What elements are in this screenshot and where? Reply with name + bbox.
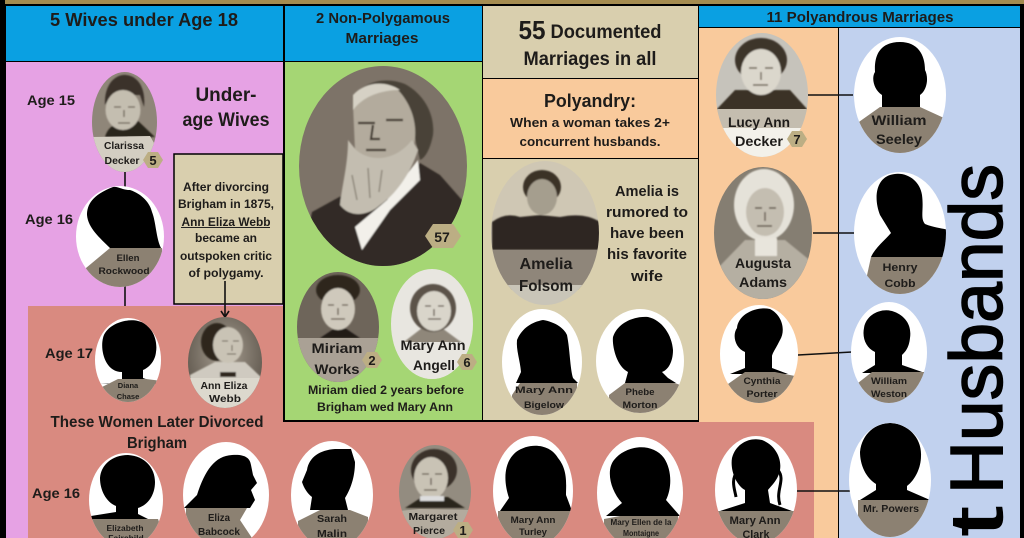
callout: Ann Eliza Webb: outspoken critic — [180, 249, 272, 263]
panel: 55 documented marriages: Documented — [550, 22, 662, 43]
heading: these women later divorced: These Women Later Divorced — [50, 414, 264, 431]
callout: Ann Eliza Webb: Ann Eliza Webb — [182, 215, 270, 229]
badge: 1: 1 — [459, 523, 467, 538]
portrait: Diana Chase: Chase — [117, 392, 139, 401]
panel: husbands column — [839, 28, 1020, 538]
portrait: Eliza Babcock: Eliza — [208, 513, 230, 524]
note: Amelia favorite: rumored to — [606, 205, 688, 221]
heading: 2 non-polygamous marriages — [285, 6, 482, 61]
note: Amelia favorite: wife — [630, 269, 663, 285]
portrait: Mary Ann Turley — [493, 436, 573, 538]
portrait: Clarissa Decker: Clarissa — [104, 141, 144, 152]
portrait: Mary Ann Angell: Angell — [413, 357, 455, 373]
portrait: Augusta Adams — [714, 167, 812, 300]
badge: 5: 5 — [149, 153, 157, 168]
portrait: Brigham Young — [299, 66, 470, 270]
note: Amelia favorite: have been — [610, 226, 684, 242]
note: Miriam — [308, 385, 464, 414]
portrait: Ellen Rockwood — [76, 186, 165, 290]
portrait: Eliza Babcock: Babcock — [198, 527, 240, 538]
portrait: William Weston: William — [871, 376, 907, 386]
heading: 2 non-polygamous marriages: 2 Non-Polygamous — [316, 10, 450, 27]
portrait: Augusta Adams: Adams — [739, 274, 787, 290]
portrait: Mary Ellen de la Montaigne: Mary Ellen de la — [610, 518, 672, 527]
portrait: Margaret Pierce — [399, 445, 473, 538]
portrait: Henry Cobb — [854, 172, 950, 295]
large rotated title fragment: t — [935, 506, 1018, 536]
portrait: Mary Ann Angell — [391, 269, 477, 380]
note: Miriam: Brigham wed Mary Ann — [317, 402, 453, 414]
portrait: Mary Ann Bigelow — [502, 309, 582, 416]
badge: 57 — [425, 224, 461, 248]
heading: these women later divorced — [50, 414, 264, 452]
portrait: Augusta Adams: Augusta — [735, 255, 791, 271]
panel: polyandrous wives column — [699, 28, 838, 538]
portrait: Sarah Malin — [291, 441, 373, 538]
portrait: Ann Eliza Webb — [185, 317, 265, 410]
note: Amelia favorite — [606, 184, 688, 285]
portrait: Ann Eliza Webb: Ann Eliza — [200, 381, 248, 392]
portrait: Phebe Morton: Morton — [622, 400, 658, 411]
age label: 16: Age 16 — [25, 211, 73, 227]
callout: Ann Eliza Webb: of polygamy. — [188, 266, 264, 280]
portrait: Mary Ann Bigelow: Bigelow — [524, 400, 565, 411]
portrait: Mr. Powers: Mr. Powers — [863, 504, 919, 515]
panel: polyandry definition: concurrent husbands. — [520, 134, 660, 149]
panel: non-polygamous — [285, 6, 482, 420]
portrait: Phebe Morton — [596, 309, 684, 416]
portrait: Sarah Malin: Sarah — [317, 513, 347, 525]
heading: 11 polyandrous marriages — [699, 6, 1020, 27]
section label: under-age wives — [182, 85, 270, 131]
portrait: Miriam Works — [296, 272, 382, 384]
section label: under-age wives: Under- — [196, 85, 256, 106]
portrait: Clarissa Decker — [92, 72, 163, 173]
age label: 17: Age 17 — [45, 345, 93, 361]
portrait: Eliza Babcock — [183, 442, 269, 538]
portrait: Phebe Morton: Phebe — [626, 387, 654, 398]
panel: 55 documented marriages: 55 — [518, 15, 546, 45]
note: Miriam: Miriam died 2 years before — [308, 385, 464, 397]
heading: 11 polyandrous marriages: 11 Polyandrous Marriages — [766, 10, 954, 26]
portrait: Clarissa Decker: Decker — [104, 156, 140, 167]
portrait: Cynthia Porter: Porter — [746, 389, 778, 399]
age label: 16 lower: Age 16 — [32, 485, 80, 501]
note: Amelia favorite: Amelia is — [615, 184, 679, 200]
note: Amelia favorite: his favorite — [607, 247, 687, 263]
portrait: Ellen Rockwood: Ellen — [116, 253, 140, 264]
heading: 2 non-polygamous marriages: Marriages — [346, 30, 418, 47]
portrait: Margaret Pierce: Pierce — [413, 525, 445, 537]
panel: polyandry definition: When a woman takes 2+ — [510, 115, 670, 130]
age label: 15: Age 15 — [27, 92, 75, 108]
heading: these women later divorced: Brigham — [127, 435, 187, 452]
portrait: Ann Eliza Webb: Webb — [209, 394, 241, 405]
portrait: William Seeley: William — [872, 112, 926, 128]
portrait: Mary Ann Turley: Turley — [519, 527, 548, 538]
callout: Ann Eliza Webb: Brigham in 1875, — [178, 197, 274, 211]
portrait: William Seeley: Seeley — [876, 131, 922, 147]
callout: Ann Eliza Webb: After divorcing — [183, 180, 269, 194]
callout: Ann Eliza Webb — [174, 154, 283, 304]
portrait: Cynthia Porter: Cynthia — [744, 376, 782, 386]
portrait: Lucy Ann Decker — [716, 33, 808, 157]
panel: 55 documented marriages: Marriages in all — [524, 49, 656, 70]
portrait: William Seeley — [853, 37, 946, 155]
portrait: Mary Ann Clark — [715, 436, 797, 538]
portrait: Miriam Works: Works — [314, 361, 360, 377]
heading: 5 wives under age 18: 5 Wives under Age 18 — [50, 10, 238, 30]
panel: 55 documented marriages — [483, 6, 698, 78]
badge: 6: 6 — [463, 355, 471, 370]
panel: under-age wives — [6, 6, 283, 538]
portrait: Henry Cobb: Cobb — [884, 278, 916, 290]
badge: 57: 57 — [434, 229, 450, 245]
portrait: Lucy Ann Decker: Decker — [735, 133, 784, 149]
portrait: Miriam Works: Miriam — [312, 340, 362, 356]
callout: Ann Eliza Webb: became an — [195, 231, 257, 245]
badge: 2: 2 — [368, 353, 376, 368]
large rotated title: Husbands: Husbands — [935, 164, 1018, 494]
connector lines — [125, 95, 855, 491]
portrait: Mary Ann Angell: Mary Ann — [400, 337, 466, 353]
panel: polyandry definition — [483, 79, 698, 158]
portrait: William Weston — [851, 302, 927, 405]
panel: wives who divorced — [28, 306, 814, 538]
portrait: Elizabeth Fairchild: Elizabeth — [106, 523, 144, 533]
heading: 5 wives under age 18 — [6, 6, 283, 61]
portrait: Mary Ann Bigelow: Mary Ann — [515, 385, 573, 396]
portrait: Margaret Pierce: Margaret — [408, 511, 458, 523]
portrait: Amelia Folsom: Folsom — [519, 278, 573, 295]
top strip — [5, 0, 1024, 4]
portrait: Diana Chase — [95, 318, 162, 405]
portrait: Mr. Powers — [849, 423, 931, 538]
portrait: William Weston: Weston — [871, 389, 907, 399]
portrait: Amelia Folsom: Amelia — [520, 256, 573, 273]
section label: under-age wives: age Wives — [182, 110, 270, 131]
portrait: Amelia Folsom — [491, 161, 600, 305]
panel: polyandry definition: Polyandry: — [544, 91, 636, 111]
portrait: Elizabeth Fairchild — [89, 453, 165, 538]
panel: Amelia — [483, 159, 698, 420]
portrait: Diana Chase: Diana — [118, 381, 139, 390]
portrait: Lucy Ann Decker: Lucy Ann — [728, 114, 790, 130]
badge: 7: 7 — [793, 132, 801, 147]
portrait: Mary Ann Turley: Mary Ann — [510, 515, 556, 526]
portrait: Mary Ellen de la Montaigne: Montaigne — [623, 529, 659, 538]
portrait: Henry Cobb: Henry — [882, 262, 918, 274]
portrait: Mary Ellen de la Montaigne — [597, 437, 683, 538]
portrait: Cynthia Porter — [720, 305, 798, 405]
portrait: Mary Ann Clark: Mary Ann — [730, 515, 781, 527]
portrait: Ellen Rockwood: Rockwood — [98, 266, 150, 277]
